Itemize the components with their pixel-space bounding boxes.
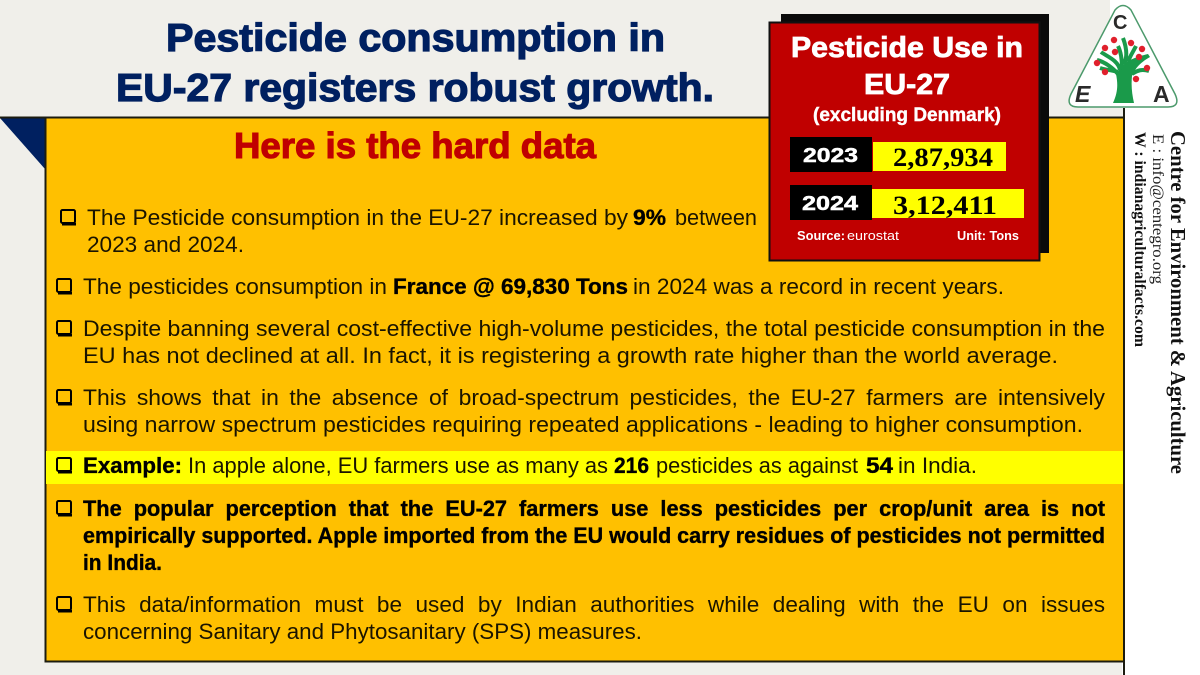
bullet 5: example: in India. [898, 453, 977, 478]
bullet 5: example: pesticides as against [656, 453, 858, 478]
data box title [791, 32, 1023, 126]
bullet 2: in 2024 was a record in recent years. [633, 274, 1004, 299]
data box: pesticide use [770, 14, 1049, 260]
bullet 2: The pesticides consumption in [83, 274, 387, 299]
row 2024 [790, 185, 1024, 220]
bullet 1 [61, 205, 757, 257]
row 2023: 2,87,934 [893, 143, 993, 172]
corner ribbon triangle [0, 118, 45, 169]
bullet 1: between [675, 205, 757, 230]
row 2023: 2023 [803, 145, 858, 167]
bullet 3: Despite banning several cost-effective high-volume pesticides, the total pesticide consumption in the [83, 316, 1105, 341]
bullet 5: example: 216 [614, 453, 649, 478]
bullet 2: France @ 69,830 Tons [393, 274, 628, 299]
bullet 6: empirically supported. Apple imported from the EU would carry residues of pesticides not permitted [83, 523, 1105, 548]
highlight band [46, 451, 1123, 484]
logo letters [1075, 12, 1170, 107]
source and unit [797, 228, 1019, 243]
bullet 7: This data/information must be used by Indian authorities while dealing with the EU on issues [83, 592, 1105, 617]
title: Pesticide consumption in [166, 17, 665, 60]
bullet 4: This shows that in the absence of broad-spectrum pesticides, the EU-27 farmers are intensively [83, 385, 1105, 410]
title: EU-27 registers robust growth. [116, 67, 714, 110]
bullet 1: 2023 and 2024. [87, 232, 244, 257]
row 2024: 3,12,411 [893, 191, 997, 220]
bullet 6: The popular perception that the EU-27 farmers use less pesticides per crop/unit area is not [83, 496, 1106, 521]
title [116, 17, 714, 110]
row 2024: 2024 [802, 193, 859, 215]
bullet 4 [57, 385, 1105, 437]
bullet 7: concerning Sanitary and Phytosanitary (SPS) measures. [83, 619, 642, 644]
bullet 5: example [57, 453, 977, 478]
bullet 3 [57, 316, 1105, 368]
bullet 5: example: Example: [83, 453, 182, 478]
source and unit: Unit: Tons [957, 228, 1019, 243]
sidebar email: E : info@centegro.org [1149, 134, 1166, 284]
bullet 6: in India. [83, 550, 162, 575]
data box title: (excluding Denmark) [813, 105, 1001, 126]
bullet 4: using narrow spectrum pesticides requiring repeated applications - leading to higher consumption. [83, 412, 1083, 437]
source and unit: eurostat [847, 228, 899, 243]
logo letters: E [1075, 81, 1091, 107]
bullet 5: example: 54 [866, 453, 894, 478]
bullet 5: example: In apple alone, EU farmers use as many as [188, 453, 608, 478]
bullet 1: 9% [633, 205, 666, 230]
logo letters: C [1113, 12, 1127, 34]
main panel [0, 108, 1124, 675]
sidebar website: W : indianagriculturalfacts.com [1131, 132, 1148, 348]
sidebar organisation name: Centre for Environment & Agriculture [1166, 131, 1190, 474]
data box title: Pesticide Use in [791, 32, 1023, 64]
bullet 3: EU has not declined at all. In fact, it is registering a growth rate higher than the world average. [83, 343, 1058, 368]
row 2023 [790, 137, 1006, 172]
logo [1069, 6, 1177, 107]
logo letters: A [1153, 81, 1170, 107]
bullet 1: The Pesticide consumption in the EU-27 increased by [87, 205, 628, 230]
heading: here is the hard data: Here is the hard data [234, 125, 597, 166]
bullet 2 [57, 274, 1004, 299]
logo tree [1094, 37, 1150, 103]
bullet 7 [57, 592, 1105, 644]
bullet 6 [57, 496, 1106, 575]
source and unit: Source: [797, 228, 845, 243]
data box title: EU-27 [864, 69, 950, 101]
